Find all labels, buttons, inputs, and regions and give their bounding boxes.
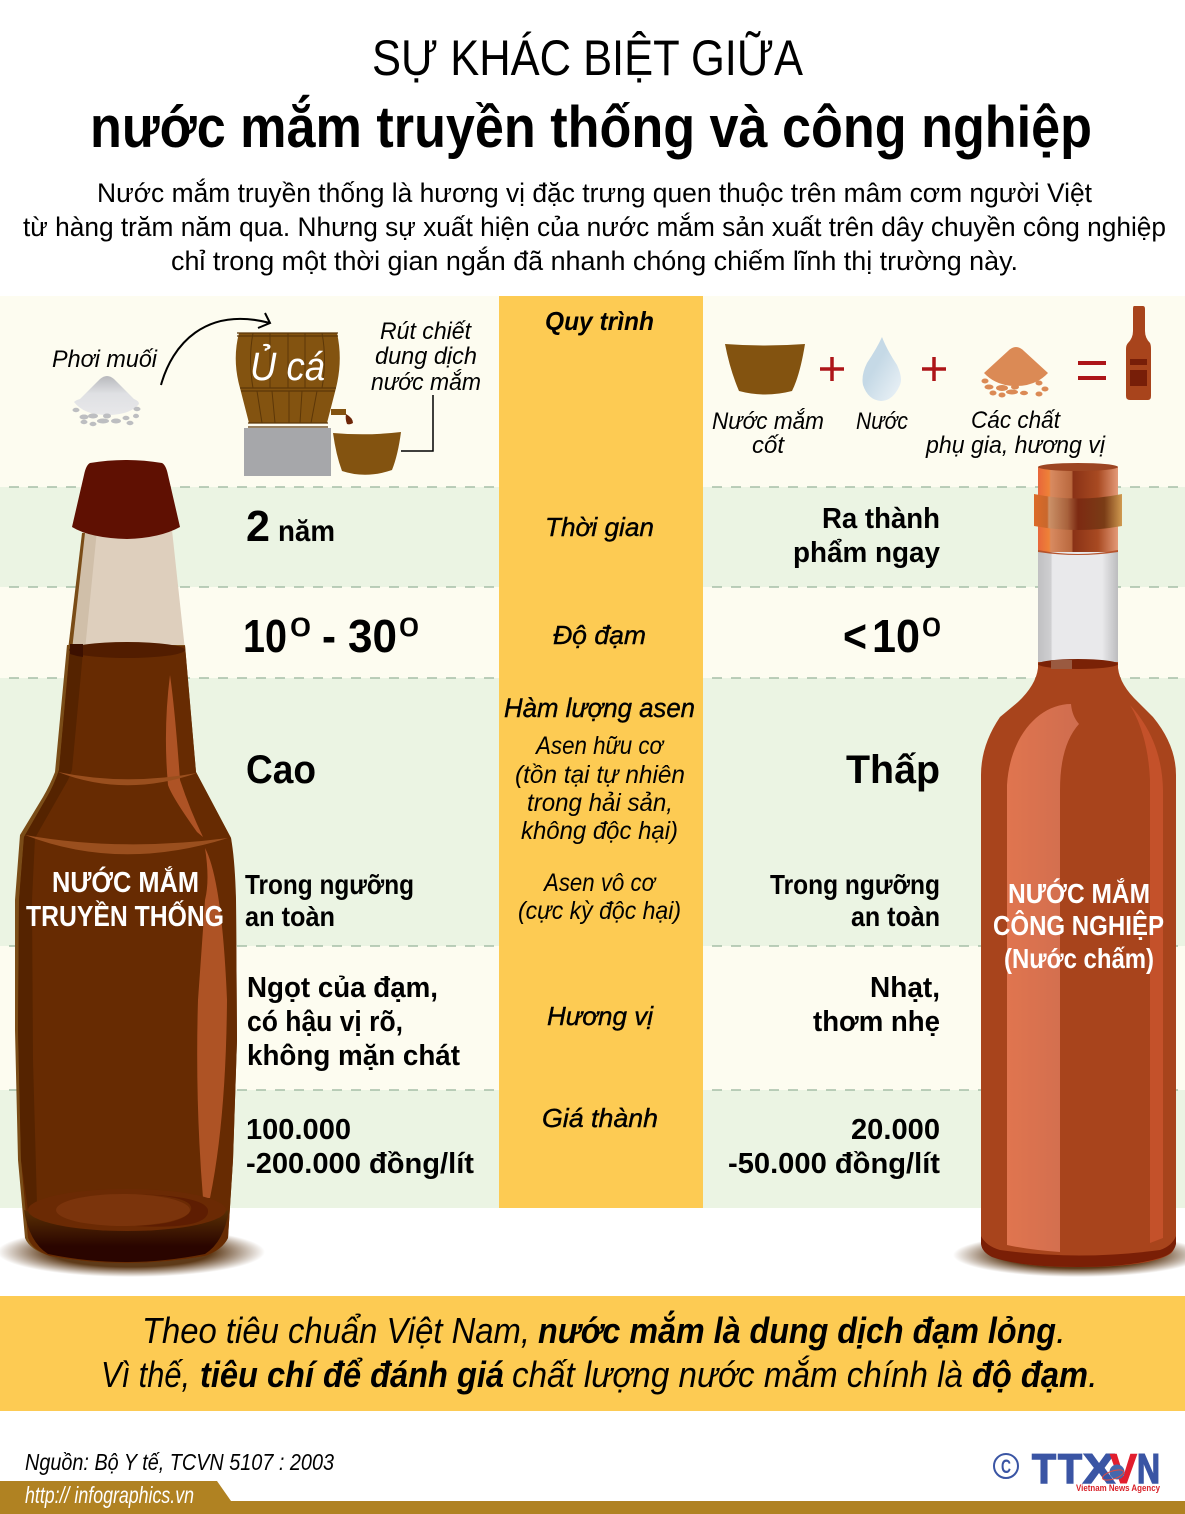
row: price bbox=[246, 1103, 940, 1180]
logo: TTXVN: X bbox=[1083, 1445, 1115, 1492]
heading: process: Quy trình bbox=[545, 306, 654, 336]
callout banner: . bbox=[1088, 1354, 1098, 1395]
row: flavour: không mặn chát bbox=[247, 1040, 460, 1072]
arrow: salt to barrel bbox=[161, 313, 270, 385]
logo: TTXVN: V bbox=[1110, 1445, 1137, 1492]
row: arsenic: không độc hại) bbox=[521, 817, 678, 845]
row: time: Ra thành bbox=[822, 503, 940, 535]
row: price: Giá thành bbox=[542, 1103, 658, 1133]
logo: TTXVN: N bbox=[1137, 1445, 1160, 1492]
glass neck bbox=[1038, 550, 1118, 662]
row: arsenic: (cực kỳ độc hại) bbox=[518, 897, 681, 925]
row: arsenic: Trong ngưỡng bbox=[245, 869, 414, 900]
cap ring bbox=[1034, 494, 1122, 530]
icon: salt pile bbox=[72, 376, 140, 426]
bottle label: NƯỚC MẮM bbox=[1008, 878, 1150, 909]
bottle label: NƯỚC MẮM bbox=[52, 865, 199, 899]
row: protein degree bbox=[243, 606, 941, 662]
callout banner: tiêu chí để đánh giá bbox=[200, 1354, 504, 1395]
logo: TTXVN bbox=[994, 1445, 1160, 1493]
intro text: từ hàng trăm năm qua. Nhưng sự xuất hiện của nước mắm sản xuất trên dây chuyền công nghiệp bbox=[23, 211, 1166, 242]
bottle: traditional fish sauce bbox=[0, 460, 265, 1277]
body bbox=[981, 662, 1176, 1267]
label: extraction: dung dịch bbox=[375, 343, 477, 370]
row: time: 2 bbox=[246, 502, 270, 551]
logo: TTXVN: T bbox=[1058, 1445, 1082, 1492]
shoulder arcs bbox=[58, 772, 197, 785]
highlight left bbox=[1007, 704, 1079, 1252]
row: protein degree: o bbox=[399, 606, 419, 644]
row: flavour bbox=[247, 972, 940, 1072]
row: protein degree: 30 bbox=[348, 610, 397, 662]
intro text: chỉ trong một thời gian ngắn đã nhanh chóng chiếm lĩnh thị trường này. bbox=[171, 245, 1018, 276]
base bbox=[24, 1210, 229, 1262]
row: protein degree: Độ đạm bbox=[553, 620, 646, 650]
callout banner: độ đạm bbox=[972, 1354, 1088, 1395]
icon: small bottle bbox=[1126, 306, 1151, 400]
footer bar: http:// infographics.vn bbox=[25, 1482, 194, 1508]
label: fermenting fish: Ủ cá bbox=[250, 342, 325, 389]
icon: concentrate bowl bbox=[725, 344, 805, 394]
row: time: phẩm ngay bbox=[793, 537, 940, 569]
liquid surface bbox=[1038, 659, 1118, 669]
footer bar bbox=[0, 1481, 1185, 1514]
row: arsenic: Asen vô cơ bbox=[542, 869, 657, 897]
intro text: Nước mắm truyền thống là hương vị đặc trưng quen thuộc trên mâm cơm người Việt bbox=[97, 177, 1092, 208]
logo: TTXVN: C bbox=[1001, 1457, 1011, 1478]
icon: equals bbox=[1078, 363, 1106, 378]
logo: TTXVN: T bbox=[1032, 1445, 1056, 1492]
row: protein degree: - bbox=[322, 610, 336, 662]
callout banner: chất lượng nước mắm chính là bbox=[512, 1354, 963, 1395]
outer glass edge bbox=[15, 645, 237, 1263]
label: ingredients: phụ gia, hương vị bbox=[925, 432, 1106, 459]
row: arsenic: Hàm lượng asen bbox=[504, 693, 695, 723]
highlight streak bbox=[166, 675, 203, 837]
base bbox=[981, 1236, 1176, 1267]
row: arsenic: an toàn bbox=[851, 901, 940, 932]
row: arsenic: Asen hữu cơ bbox=[534, 732, 665, 760]
row: arsenic: trong hải sản, bbox=[527, 789, 673, 817]
bottle: traditional fish sauce: TRUYỀN THỐNG bbox=[26, 899, 224, 933]
icon: plus two bbox=[922, 357, 946, 381]
row: arsenic: Thấp bbox=[846, 748, 940, 792]
callout banner: nước mắm là dung dịch đạm lỏng bbox=[538, 1309, 1056, 1351]
liquid bbox=[18, 646, 237, 1263]
title: SỰ KHÁC BIỆT GIỮA bbox=[372, 30, 804, 86]
icon: water drop bbox=[862, 337, 901, 401]
row: time bbox=[246, 502, 940, 569]
label: extraction: nước mắm bbox=[371, 369, 481, 396]
row: protein degree: < bbox=[843, 610, 867, 662]
callout banner: Theo tiêu chuẩn Việt Nam, bbox=[142, 1310, 530, 1351]
title bbox=[90, 30, 1092, 160]
comparison table background bbox=[0, 296, 1185, 1208]
label: ingredients: Nước bbox=[856, 408, 908, 435]
dark left stripe bbox=[18, 648, 83, 1225]
row: flavour: Ngọt của đạm, bbox=[247, 972, 438, 1004]
highlight right bbox=[1130, 705, 1163, 1243]
callout banner: Vì thế, bbox=[101, 1354, 190, 1395]
cap bbox=[1038, 467, 1118, 552]
label: extraction: Rút chiết bbox=[380, 318, 472, 345]
row: price: 100.000 bbox=[246, 1114, 351, 1146]
row: arsenic bbox=[245, 693, 940, 932]
row: price: 20.000 bbox=[851, 1114, 940, 1146]
title: nước mắm truyền thống và công nghiệp bbox=[90, 95, 1092, 160]
row: flavour: Nhạt, bbox=[870, 972, 940, 1004]
label: extraction bbox=[371, 318, 481, 396]
row: flavour: thơm nhẹ bbox=[813, 1006, 940, 1038]
label: ingredients: cốt bbox=[752, 432, 785, 459]
label: ingredients: Các chất bbox=[971, 407, 1061, 434]
bottle: industrial fish sauce bbox=[953, 463, 1185, 1277]
label: salt drying: Phơi muối bbox=[52, 346, 158, 373]
bottle: industrial fish sauce: (Nước chấm) bbox=[1004, 943, 1154, 974]
intro text bbox=[23, 177, 1166, 276]
liquid surface bbox=[69, 642, 185, 658]
row: arsenic: Cao bbox=[246, 748, 316, 792]
callout banner: . bbox=[1056, 1310, 1066, 1351]
row: price: -200.000 đồng/lít bbox=[246, 1148, 474, 1180]
icon: fermenting barrel bbox=[236, 333, 353, 476]
source: Nguồn: Bộ Y tế, TCVN 5107 : 2003 bbox=[25, 1449, 334, 1475]
connector: extraction to bowl bbox=[401, 395, 433, 451]
logo: TTXVN: Vietnam News Agency bbox=[1076, 1483, 1160, 1493]
cap bbox=[72, 460, 180, 539]
row: flavour: Hương vị bbox=[547, 1001, 654, 1031]
label: ingredients bbox=[712, 407, 1106, 459]
icon: plus one bbox=[820, 357, 844, 381]
row: time: Thời gian bbox=[545, 512, 654, 542]
icon: collecting bowl bbox=[333, 432, 401, 475]
row: protein degree: 10 bbox=[872, 610, 920, 662]
label: ingredients: Nước mắm bbox=[712, 408, 824, 435]
row: flavour: có hậu vị rõ, bbox=[247, 1006, 403, 1038]
row: arsenic: Trong ngưỡng bbox=[770, 869, 940, 900]
row: protein degree: 10 bbox=[243, 610, 287, 662]
row: arsenic: an toàn bbox=[245, 901, 335, 932]
icon: additives pile bbox=[982, 347, 1048, 398]
callout banner bbox=[0, 1296, 1185, 1411]
glass neck bbox=[70, 530, 185, 650]
row: price: -50.000 đồng/lít bbox=[728, 1148, 940, 1180]
row: arsenic: (tồn tại tự nhiên bbox=[515, 761, 685, 789]
row: protein degree: o bbox=[290, 606, 311, 644]
row: time: năm bbox=[278, 515, 335, 548]
row: protein degree: o bbox=[922, 606, 941, 644]
